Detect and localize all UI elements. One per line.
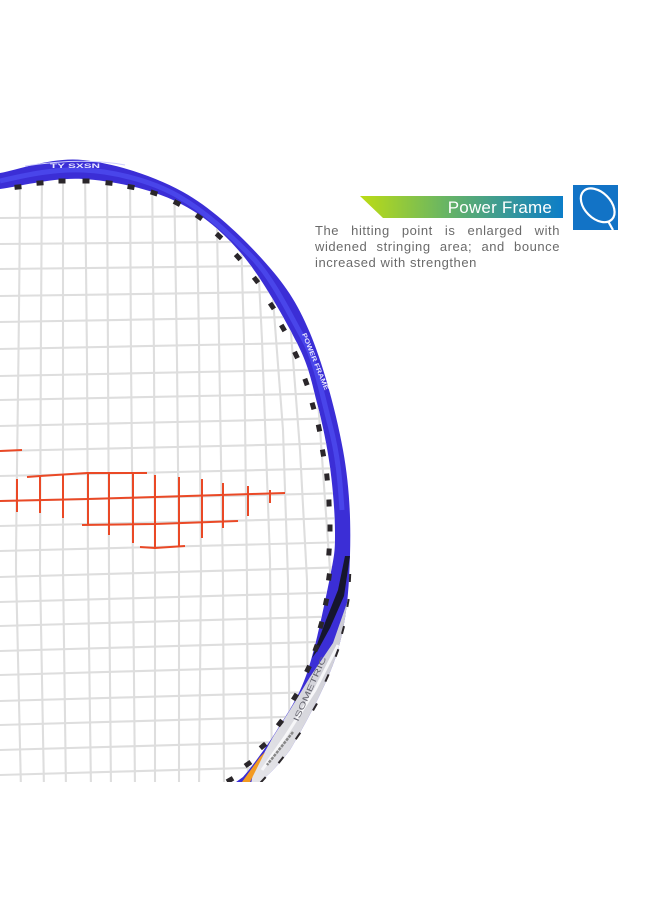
banner: gradient ribbon <box>360 196 563 218</box>
grommets <box>14 178 351 784</box>
white shine on throat <box>262 645 338 770</box>
frame print: top: TY SXSN <box>50 163 101 170</box>
black stripe on frame <box>312 556 350 658</box>
small print on throat <box>267 732 293 765</box>
inner string bed <box>0 179 335 800</box>
illustration: badminton racket head <box>0 160 352 782</box>
text block: description: increased with strengthen <box>315 255 477 270</box>
frame print: power frame: POWER FRAME <box>300 332 330 392</box>
text block: description: The hitting point is enlarged with <box>315 223 560 238</box>
blue racket frame <box>0 159 350 800</box>
heading: Power Frame: Power Frame <box>448 198 552 217</box>
racket strings <box>0 170 350 790</box>
frame highlight <box>0 170 342 510</box>
text block: description <box>315 223 560 270</box>
silver throat section <box>251 603 347 782</box>
orange accent <box>242 752 265 782</box>
text block: description: widened stringing area; and bounce <box>315 239 560 254</box>
orange logo stencilled on strings <box>0 450 285 549</box>
frame top edge shine <box>25 161 125 166</box>
throat lettering: ISOMETRIC <box>292 655 328 723</box>
icon: racket in blue square <box>573 185 618 230</box>
